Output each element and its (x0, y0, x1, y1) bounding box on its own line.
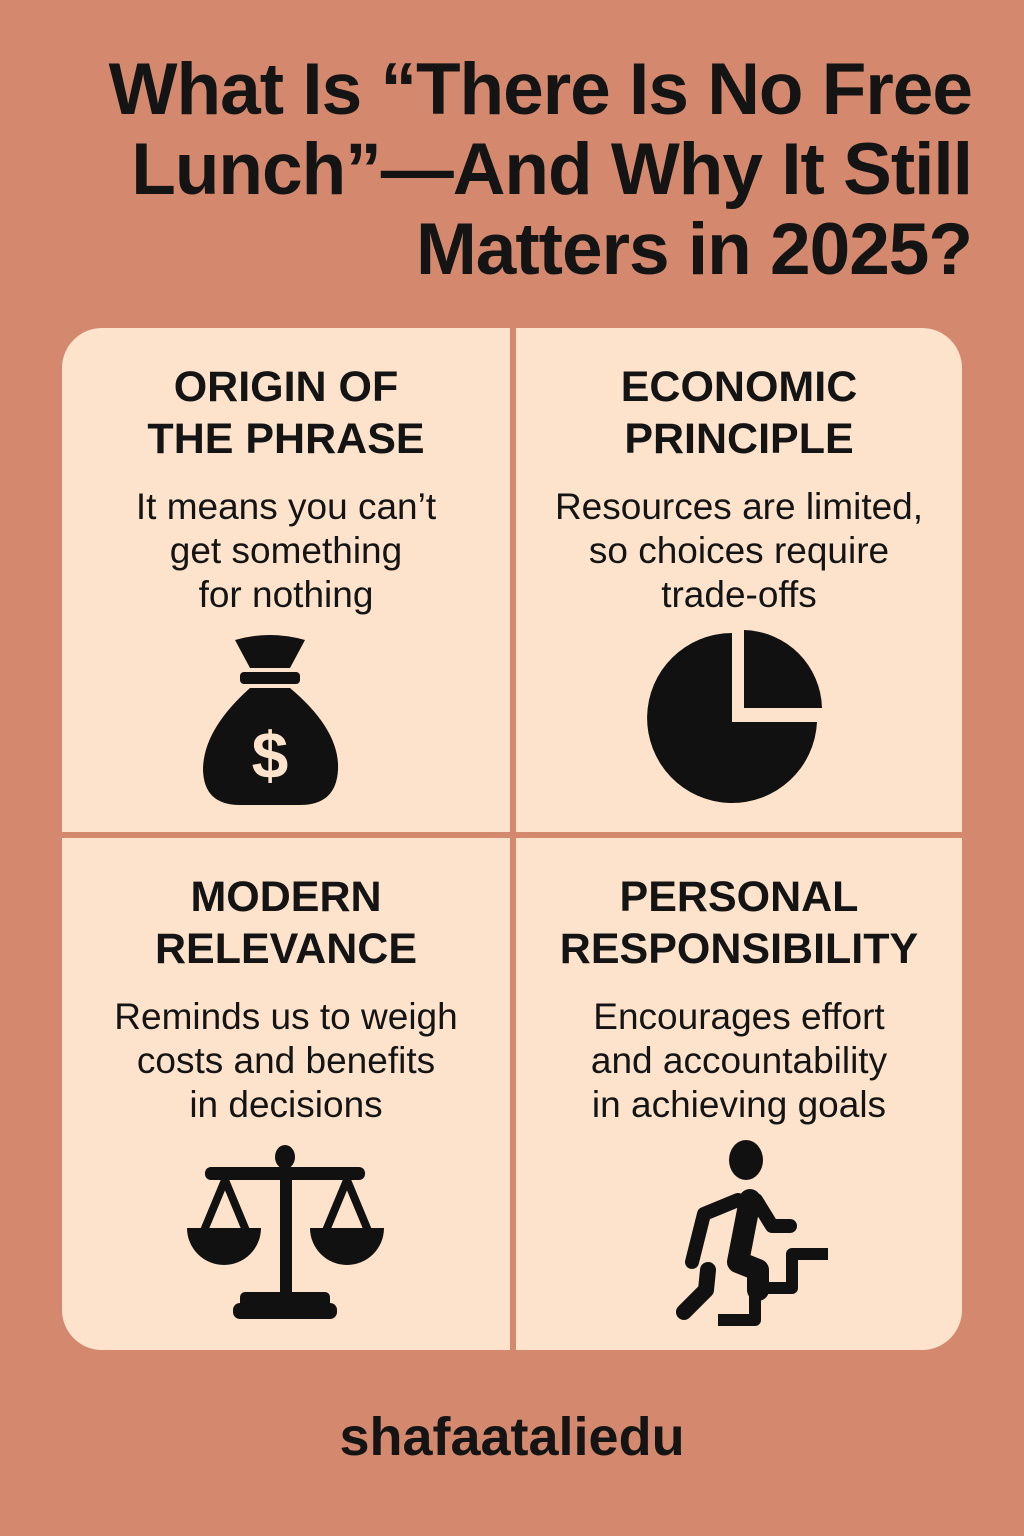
panel: economic principle: PRINCIPLE (624, 415, 854, 463)
title (108, 49, 972, 290)
panel: personal responsibility (516, 838, 962, 1350)
panel: modern relevance: in decisions (189, 1084, 383, 1125)
panel: modern relevance: MODERN (190, 873, 382, 921)
panel: origin of the phrase: get something (170, 530, 402, 571)
panel: modern relevance (62, 838, 510, 1350)
title: What Is “There Is No Free (109, 49, 972, 130)
icon: money bag (203, 635, 338, 805)
panel: origin of the phrase: for nothing (199, 574, 373, 615)
panel: economic principle: trade-offs (661, 574, 817, 615)
panel: personal responsibility: Encourages effort (593, 996, 885, 1037)
panel: personal responsibility: and accountability (591, 1040, 887, 1081)
panel: origin of the phrase: ORIGIN OF (174, 363, 398, 411)
panel: modern relevance: costs and benefits (137, 1040, 435, 1081)
panel: personal responsibility: PERSONAL (620, 873, 858, 921)
icon: balance scale (187, 1145, 384, 1319)
panel grid (62, 328, 962, 1350)
panel: modern relevance: RELEVANCE (155, 925, 417, 973)
panel: economic principle (516, 328, 962, 832)
panel: origin of the phrase: It means you can’t (136, 486, 436, 527)
icon: person climbing stairs (684, 1140, 828, 1320)
panel: modern relevance: Reminds us to weigh (114, 996, 458, 1037)
footer: shafaataliedu (339, 1407, 685, 1467)
title: Lunch”—And Why It Still (131, 129, 972, 210)
icon: pie chart (647, 630, 822, 803)
panel: economic principle: ECONOMIC (621, 363, 857, 411)
panel: economic principle: Resources are limited, (555, 486, 923, 527)
panel: origin of the phrase (62, 328, 510, 832)
panel: personal responsibility: in achieving goals (592, 1084, 886, 1125)
icon: money bag: $ (252, 718, 288, 792)
panel: personal responsibility: RESPONSIBILITY (560, 925, 918, 973)
panel: origin of the phrase: THE PHRASE (147, 415, 425, 463)
title: Matters in 2025? (416, 209, 972, 290)
panel: economic principle: so choices require (589, 530, 889, 571)
